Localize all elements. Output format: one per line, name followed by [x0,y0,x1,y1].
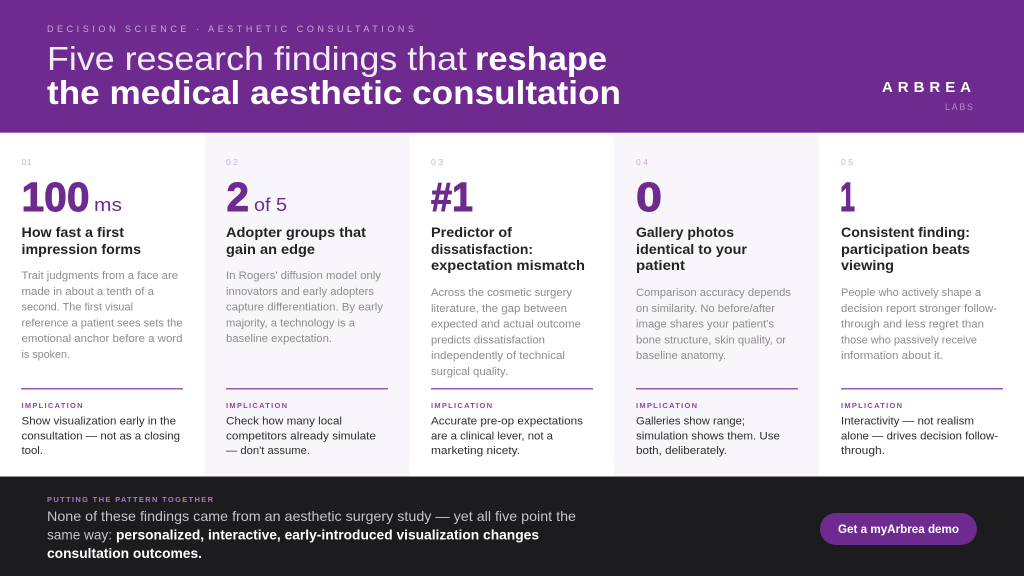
implication [841,388,1003,457]
button: demo [820,513,977,545]
implication: marketing nicety. [431,445,520,457]
implication [636,388,798,457]
body text: independently of technical [431,350,565,362]
title [47,40,621,111]
body text: made in about a tenth of a [22,286,155,298]
panel: finding 01: 01 [22,157,32,167]
body text: In Rogers' diffusion model only [226,270,382,282]
title: reshape [475,40,607,77]
heading [841,224,970,273]
footer summary: same way: [47,526,112,542]
heading: Consistent finding: [841,224,970,240]
body text: baseline anatomy. [636,350,726,362]
body text: majority, a technology is a [226,317,356,329]
button: demo: Get a myArbrea demo [838,524,959,536]
implication: — don't assume. [226,445,310,457]
implication: Interactivity — not realism [841,416,974,428]
implication: simulation shows them. Use [636,430,780,442]
panel: finding 04: 04 [636,157,648,167]
body text: innovators and early adopters [226,286,374,298]
footer summary: None of these findings came from an aesthetic surgery study — yet all five point the [47,508,576,524]
body text: on similarity. No before/after [636,303,775,315]
heading: dissatisfaction: [431,241,533,257]
body text: emotional anchor before a word [22,333,183,345]
stat: #1: #1 [431,174,473,220]
body text: People who actively shape a [841,287,982,299]
heading [636,224,748,273]
panel: finding 05 [819,133,1024,476]
implication: IMPLICATION [636,401,697,410]
implication: are a clinical lever, not a [431,430,554,442]
body text [22,270,183,361]
implication: tool. [22,445,43,457]
body text: expected and actual outcome [431,319,581,331]
implication: both, deliberately. [636,445,727,457]
panel: finding 03: 03 [431,157,443,167]
body text: Trait judgments from a face are [22,270,178,282]
body text [226,270,384,345]
header band [0,0,1024,133]
implication: competitors already simulate [226,430,376,442]
stat: 100 ms [22,174,122,220]
title: Five research findings that [47,40,467,77]
body text: second. The first visual [22,302,133,314]
panel: finding 04 [614,133,819,476]
implication: Show visualization early in the [22,416,176,428]
body text [636,287,792,362]
footer label: PUTTING THE PATTERN TOGETHER [47,495,214,504]
heading: Gallery photos [636,224,734,240]
footer band [0,476,1024,576]
implication [21,388,183,457]
implication: IMPLICATION [226,401,287,410]
body text: those who passively receive [841,334,977,346]
panel: finding 03 [410,133,614,476]
body text [431,287,581,378]
heading: impression forms [22,241,141,257]
body text: reference a patient sees sets the [22,317,182,329]
implication: alone — drives decision follow- [841,430,998,442]
implication [431,388,593,457]
logo: ARBREA [882,79,971,96]
body text: baseline expectation. [226,333,332,345]
body text: Across the cosmetic surgery [431,287,573,299]
stat: 2 of 5: of 5 [254,195,287,215]
heading: gain an edge [226,241,315,257]
body text: bone structure, skin quality, or [636,334,786,346]
stat: 2 of 5 [226,174,287,220]
body text: predicts dissatisfaction [431,334,545,346]
body text: through and less regret than [841,319,984,331]
implication: IMPLICATION [841,401,902,410]
panel: finding 05: 05 [841,157,853,167]
stat: 0: 0 [636,174,662,220]
panel: finding 01 [0,133,204,476]
body text: literature, the gap between [431,303,567,315]
title: the medical aesthetic consultation [47,74,621,111]
implication: consultation — not as a closing [22,430,180,442]
implication: IMPLICATION [431,401,492,410]
heading: identical to your [636,241,748,257]
stat: 1: 1 [840,174,855,220]
panel: finding 02 [204,133,410,476]
body text: Comparison accuracy depends [636,287,792,299]
heading: Adopter groups that [226,224,366,240]
heading: participation beats [841,241,970,257]
panel: finding 02: 02 [226,157,238,167]
heading: viewing [841,257,894,273]
body text: decision report stronger follow- [841,303,997,315]
body text: image shares your patient's [636,319,775,331]
implication: Check how many local [226,416,342,428]
heading [22,224,141,257]
implication: IMPLICATION [22,401,82,410]
stat: 2 of 5: 2 [226,174,249,220]
footer summary [47,508,576,561]
implication: Accurate pre-op expectations [431,416,584,428]
stat: 100 ms: ms [94,195,122,215]
body text: is spoken. [22,349,70,361]
logo: LABS [945,102,973,112]
footer summary: personalized, interactive, early-introduced visualization changes [116,526,539,542]
footer summary: consultation outcomes. [47,545,202,561]
heading [226,224,366,257]
heading: expectation mismatch [431,257,585,273]
heading [431,224,585,273]
implication: Galleries show range; [636,416,745,428]
body text: capture differentiation. By early [226,302,384,314]
implication [226,388,388,457]
body text: information about it. [841,350,943,362]
heading: patient [636,257,685,273]
body text [841,287,997,362]
stat: 100 ms: 100 [22,174,90,220]
heading: Predictor of [431,224,512,240]
logo [882,79,973,112]
implication: through. [841,445,885,457]
body text: surgical quality. [431,366,508,378]
heading: How fast a first [22,224,124,240]
eyebrow: DECISION SCIENCE · AESTHETIC CONSULTATIONS [47,24,414,34]
